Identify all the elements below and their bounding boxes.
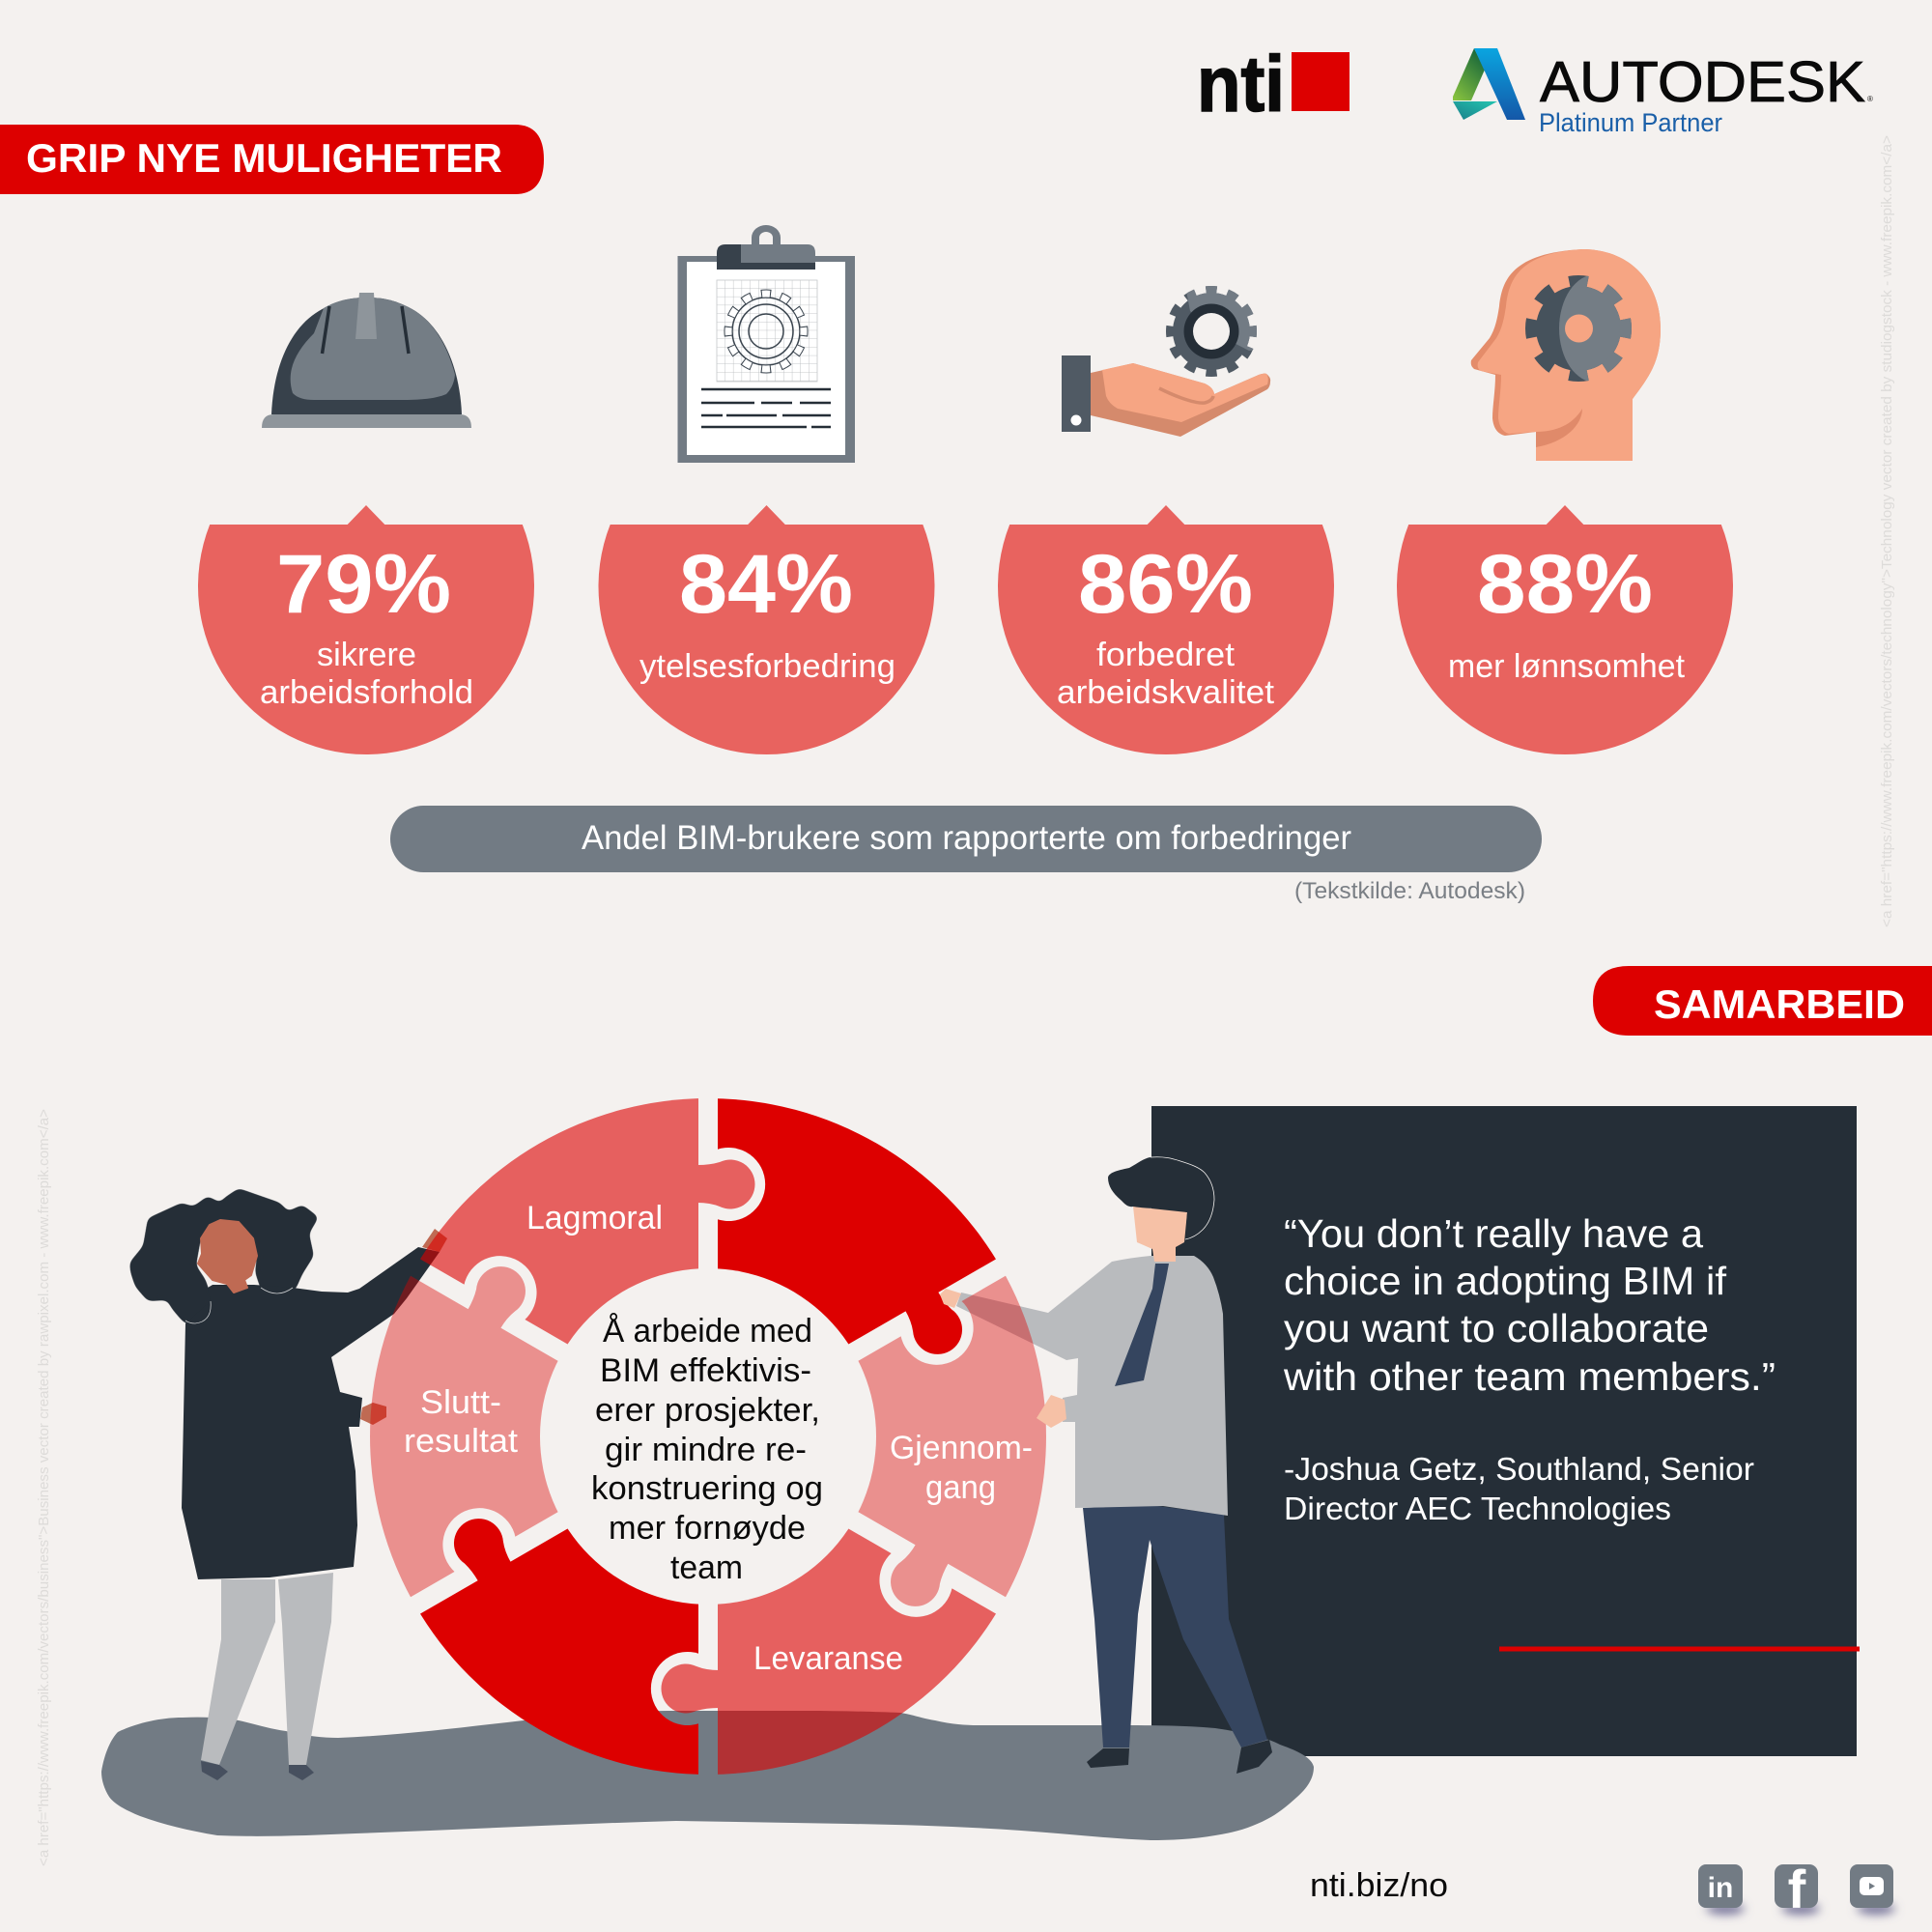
watermark credit left: <a href="https://www.freepik.com/vectors/business">Business vector created by rawpixel.com - www.freepik.com</a> [36,1109,52,1866]
puzzle labels: resultat [404,1423,519,1460]
footer link: nti.biz/no [1310,1867,1448,1904]
puzzle labels: Levaranse [753,1640,903,1677]
watermark credit right: <a href="https://www.freepik.com/vectors/technology">Technology vector created by studiogstock - www.freepik.com</a> [1879,135,1895,927]
piece: Lagmoral [420,1098,755,1345]
stat badge: 88%: mer lønnsomhet [1448,648,1686,685]
man hands [940,1289,1066,1428]
man shirt [956,1256,1228,1516]
stat badge: 79%: 79% [276,538,451,631]
quote text: with other team members.” [1283,1354,1776,1399]
icon: clipboard with blueprint [678,225,855,463]
heading ribbon: SAMARBEID: SAMARBEID [1654,981,1905,1027]
ground shadow blob [101,1711,1314,1840]
piece: Levaranse [661,1528,996,1775]
icon: YouTube [1850,1864,1895,1915]
icon: LinkedIn: in [1708,1872,1733,1904]
woman face [198,1220,257,1293]
icon: hard hat [262,293,471,428]
puzzle centre text: team [670,1549,743,1586]
quote text: “You don’t really have a [1284,1211,1703,1256]
icon: Facebook [1775,1859,1820,1919]
panel: quote [1151,1106,1860,1756]
woman body [182,1247,440,1579]
stat badge: 79% [198,505,534,754]
puzzle centre text: gir mindre re- [605,1432,807,1468]
puzzle centre text: BIM effektivis- [600,1352,811,1389]
man face [1133,1207,1187,1262]
heading ribbon: SAMARBEID [1593,966,1932,1036]
quote text: you want to collaborate [1284,1306,1709,1350]
puzzle labels: gang [925,1469,996,1506]
puzzle centre text: konstruering og [591,1470,823,1507]
caption pill: Andel BIM-brukere som rapporterte om forbedringer [582,819,1351,857]
stat badge: 88% [1397,505,1733,754]
figure: man [956,1157,1272,1774]
stat badge: 86%: arbeidskvalitet [1057,674,1275,711]
stat badge: 79%: arbeidsforhold [260,674,473,711]
stat badge: 86%: 86% [1078,538,1253,631]
icon: Facebook: f [1788,1859,1806,1919]
logo: nti [1197,41,1350,128]
stat badge: 84%: 84% [679,538,853,631]
quote attribution [1284,1451,1754,1526]
logo: Autodesk Platinum Partner: Platinum Partner [1539,108,1722,137]
puzzle wheel [370,1098,1046,1775]
woman hands [422,1229,447,1252]
piece: top right red [718,1098,996,1354]
logo: Autodesk Platinum Partner [1453,48,1873,137]
stat badge: 88%: 88% [1477,538,1653,631]
logo: Autodesk Platinum Partner: ® [1867,95,1873,103]
puzzle centre text: Å arbeide med [603,1313,812,1350]
icon: LinkedIn [1698,1864,1745,1915]
puzzle centre text [591,1313,823,1586]
quote text: choice in adopting BIM if [1284,1259,1727,1303]
puzzle centre text: erer prosjekter, [595,1392,820,1429]
stat badge: 79%: sikrere [317,637,416,673]
woman legs [201,1573,333,1765]
figure: woman [129,1188,447,1780]
source note: (Tekstkilde: Autodesk) [1294,878,1525,904]
heading ribbon: GRIP NYE MULIGHETER [0,125,544,194]
heading ribbon: GRIP NYE MULIGHETER: GRIP NYE MULIGHETER [26,135,502,181]
puzzle centre text: mer fornøyde [609,1510,806,1547]
man hair [1108,1157,1214,1239]
quote attribution: -Joshua Getz, Southland, Senior [1284,1451,1754,1487]
stat badge: 84%: ytelsesforbedring [639,648,895,685]
puzzle labels [404,1200,1033,1677]
man legs [1083,1505,1267,1747]
stat badge: 84% [598,505,935,754]
logo: Autodesk Platinum Partner: AUTODESK [1540,50,1865,114]
puzzle labels: Lagmoral [526,1200,663,1236]
icon: head with gear [1471,249,1661,461]
woman hair [129,1188,319,1326]
quote text [1283,1211,1776,1399]
man tie [1115,1264,1169,1386]
quote attribution: Director AEC Technologies [1284,1491,1671,1526]
woman hair outline strokes [185,1288,293,1323]
piece: Gjennomgang [858,1275,1046,1606]
puzzle labels: Gjennom- [890,1430,1033,1466]
logo: nti: nti [1197,41,1285,128]
puzzle labels: Slutt- [420,1384,501,1421]
caption pill [390,806,1542,872]
stat badge: 86%: forbedret [1096,637,1236,673]
piece: Sluttresultat [370,1266,558,1598]
icon: hand holding gear [1062,290,1270,437]
piece: bottom left red [420,1519,698,1775]
stat badge: 86% [998,505,1334,754]
